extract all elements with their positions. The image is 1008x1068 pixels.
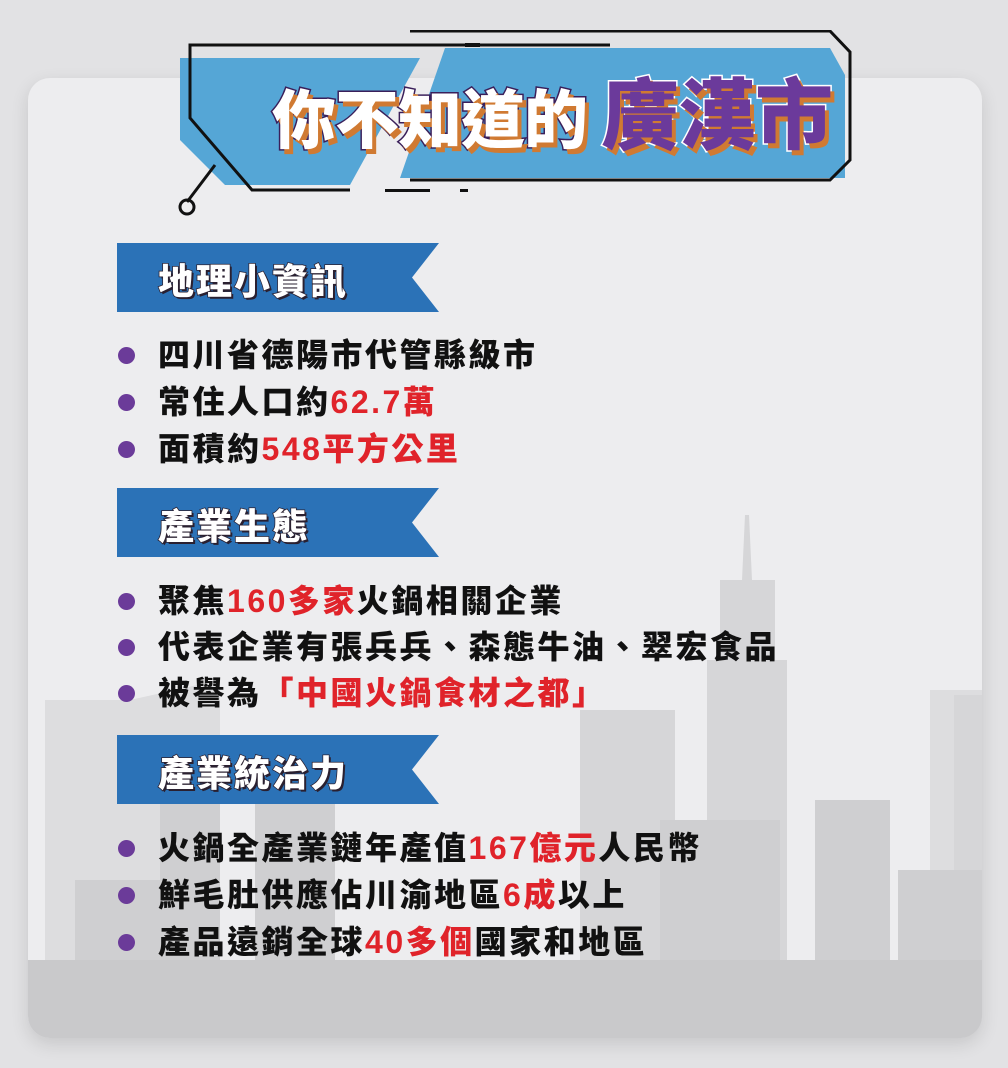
section header: 產業生態 [117,488,439,557]
bullet list: dominance [118,830,702,960]
bullet list: geography [118,337,538,467]
bullet list: dominance: 火鍋全產業鏈年產值167億元人民幣 [158,830,702,866]
title text: 你不知道的廣漢市 [272,72,832,160]
bullet list: geography: 常住人口約62.7萬 [158,384,437,420]
bullet list: industry: 聚焦160多家火鍋相關企業 [158,583,564,619]
bullet list: industry [118,583,779,711]
bullet list: industry: 代表企業有張兵兵、森態牛油、翠宏食品 [158,629,779,665]
bullet list: dominance: 產品遠銷全球40多個國家和地區 [158,924,647,960]
bullet list: dominance: 鮮毛肚供應佔川渝地區6成以上 [158,877,627,913]
bullet list: industry: 被譽為「中國火鍋食材之都」 [158,675,607,711]
section header: 產業生態: 產業生態 [158,506,310,547]
title banner [178,30,852,216]
bullet list: geography: 面積約548平方公里 [158,431,460,467]
section header: 產業統治力: 產業統治力 [158,753,348,794]
section header: 產業統治力 [117,735,439,804]
bullet list: geography: 四川省德陽市代管縣級市 [158,337,538,373]
section header: 地理小資訊: 地理小資訊 [158,261,348,302]
section header: 地理小資訊 [117,243,439,312]
